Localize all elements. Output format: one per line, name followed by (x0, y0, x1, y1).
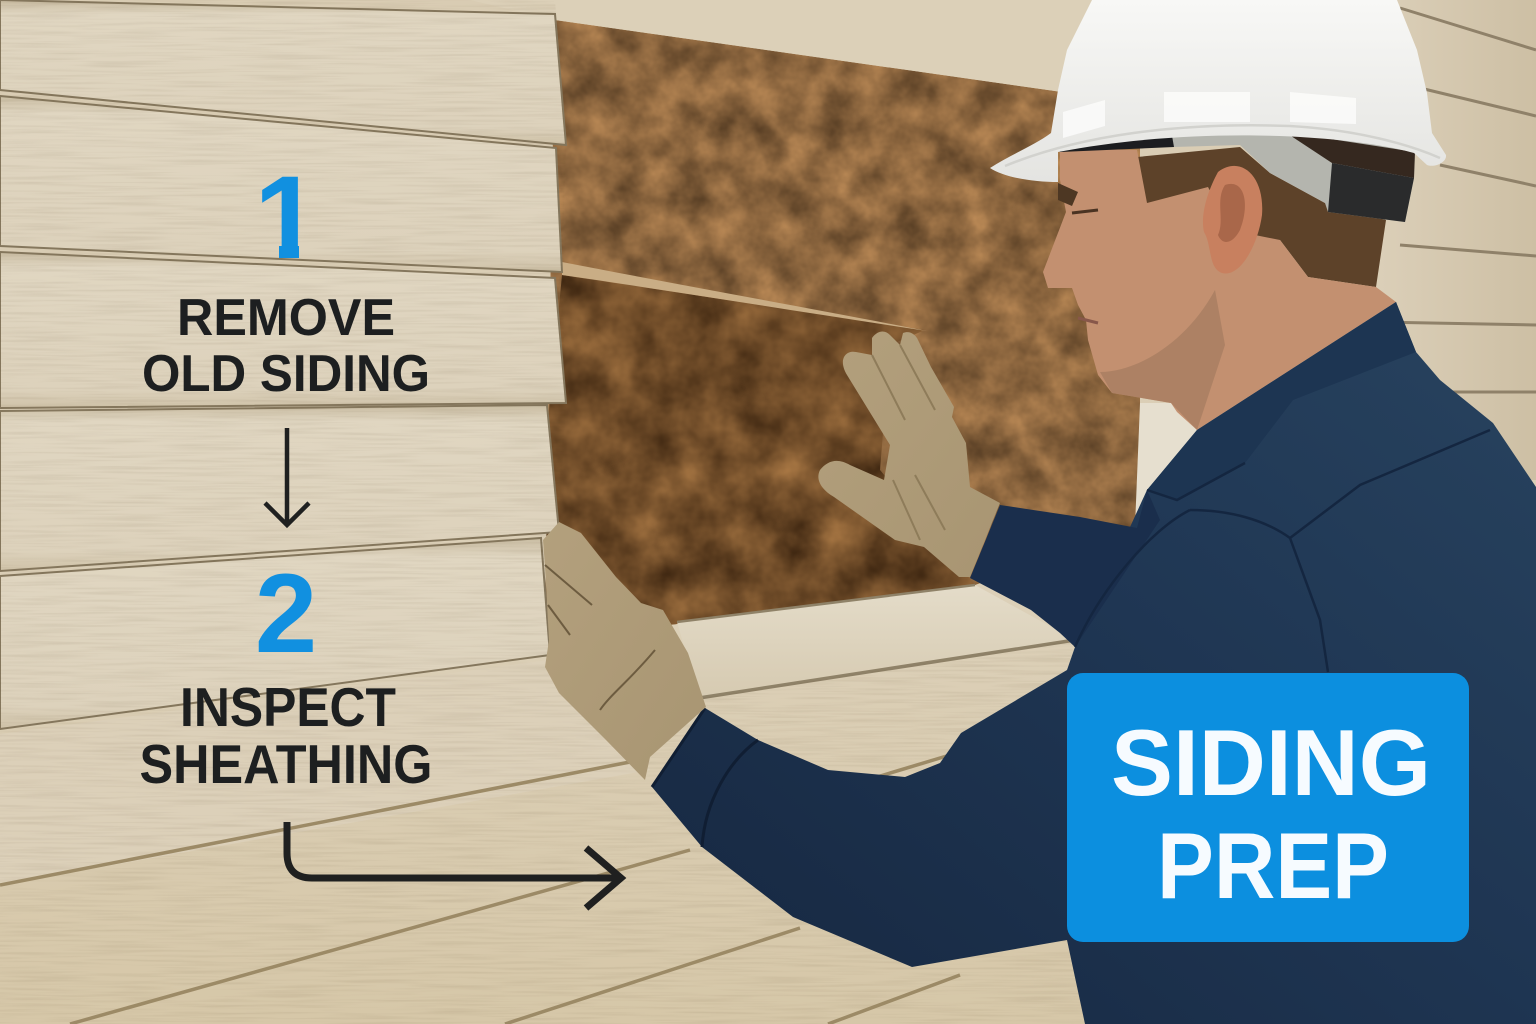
title badge: siding prep (1067, 673, 1469, 942)
ear (1203, 166, 1262, 274)
eyebrow (1058, 183, 1078, 206)
shirt seams (1075, 430, 1490, 672)
face and neck (1043, 148, 1396, 430)
arrow: next step (287, 822, 621, 908)
hard hat (990, 0, 1446, 182)
step 2 number: 2 (255, 551, 317, 676)
right glove on sheathing (818, 332, 1000, 577)
mouth (1078, 318, 1098, 323)
sill board below opening (677, 585, 1075, 698)
step 1 number: 1 (254, 152, 320, 284)
lower wall board lines (0, 755, 960, 1024)
top siding band above opening (470, 0, 1095, 92)
step 2 label: SHEATHING (140, 733, 432, 795)
dark helmet interior (1285, 132, 1415, 178)
helmet ridges (1063, 92, 1356, 138)
step 1 label: OLD SIDING (142, 345, 430, 403)
badge text: SIDING (1111, 710, 1431, 815)
ear inner (1218, 184, 1245, 242)
helmet strap (1328, 163, 1414, 222)
collar (1147, 302, 1416, 500)
badge text: PREP (1157, 813, 1389, 918)
finger and cuff seams (872, 345, 945, 540)
right board shadow lines (1380, 8, 1536, 392)
back hair (1130, 147, 1386, 287)
left glove on siding (543, 522, 706, 780)
step 2 label: INSPECT (180, 676, 396, 738)
siding grain texture (0, 0, 1090, 1024)
step 1 label: REMOVE (177, 289, 395, 347)
sheathing panel (540, 15, 1145, 645)
torn sheathing flap (540, 270, 980, 645)
torn edge (562, 262, 927, 331)
window trim at right (1135, 403, 1200, 527)
worker (652, 0, 1536, 1024)
siding: right side boards (1380, 0, 1536, 480)
shirt body and arm (652, 302, 1536, 1024)
cuff fold lines (652, 708, 758, 847)
stubble shadow on jaw (1100, 290, 1225, 430)
closed eye (1072, 210, 1098, 213)
left glove seams (545, 565, 655, 710)
helmet brim edge (1005, 125, 1440, 166)
upper forearm (970, 490, 1160, 647)
left siding boards (0, 0, 650, 885)
dark head band (1058, 130, 1174, 152)
arrow: step 1 to step 2 (265, 428, 309, 525)
helmet liner (1171, 130, 1415, 222)
